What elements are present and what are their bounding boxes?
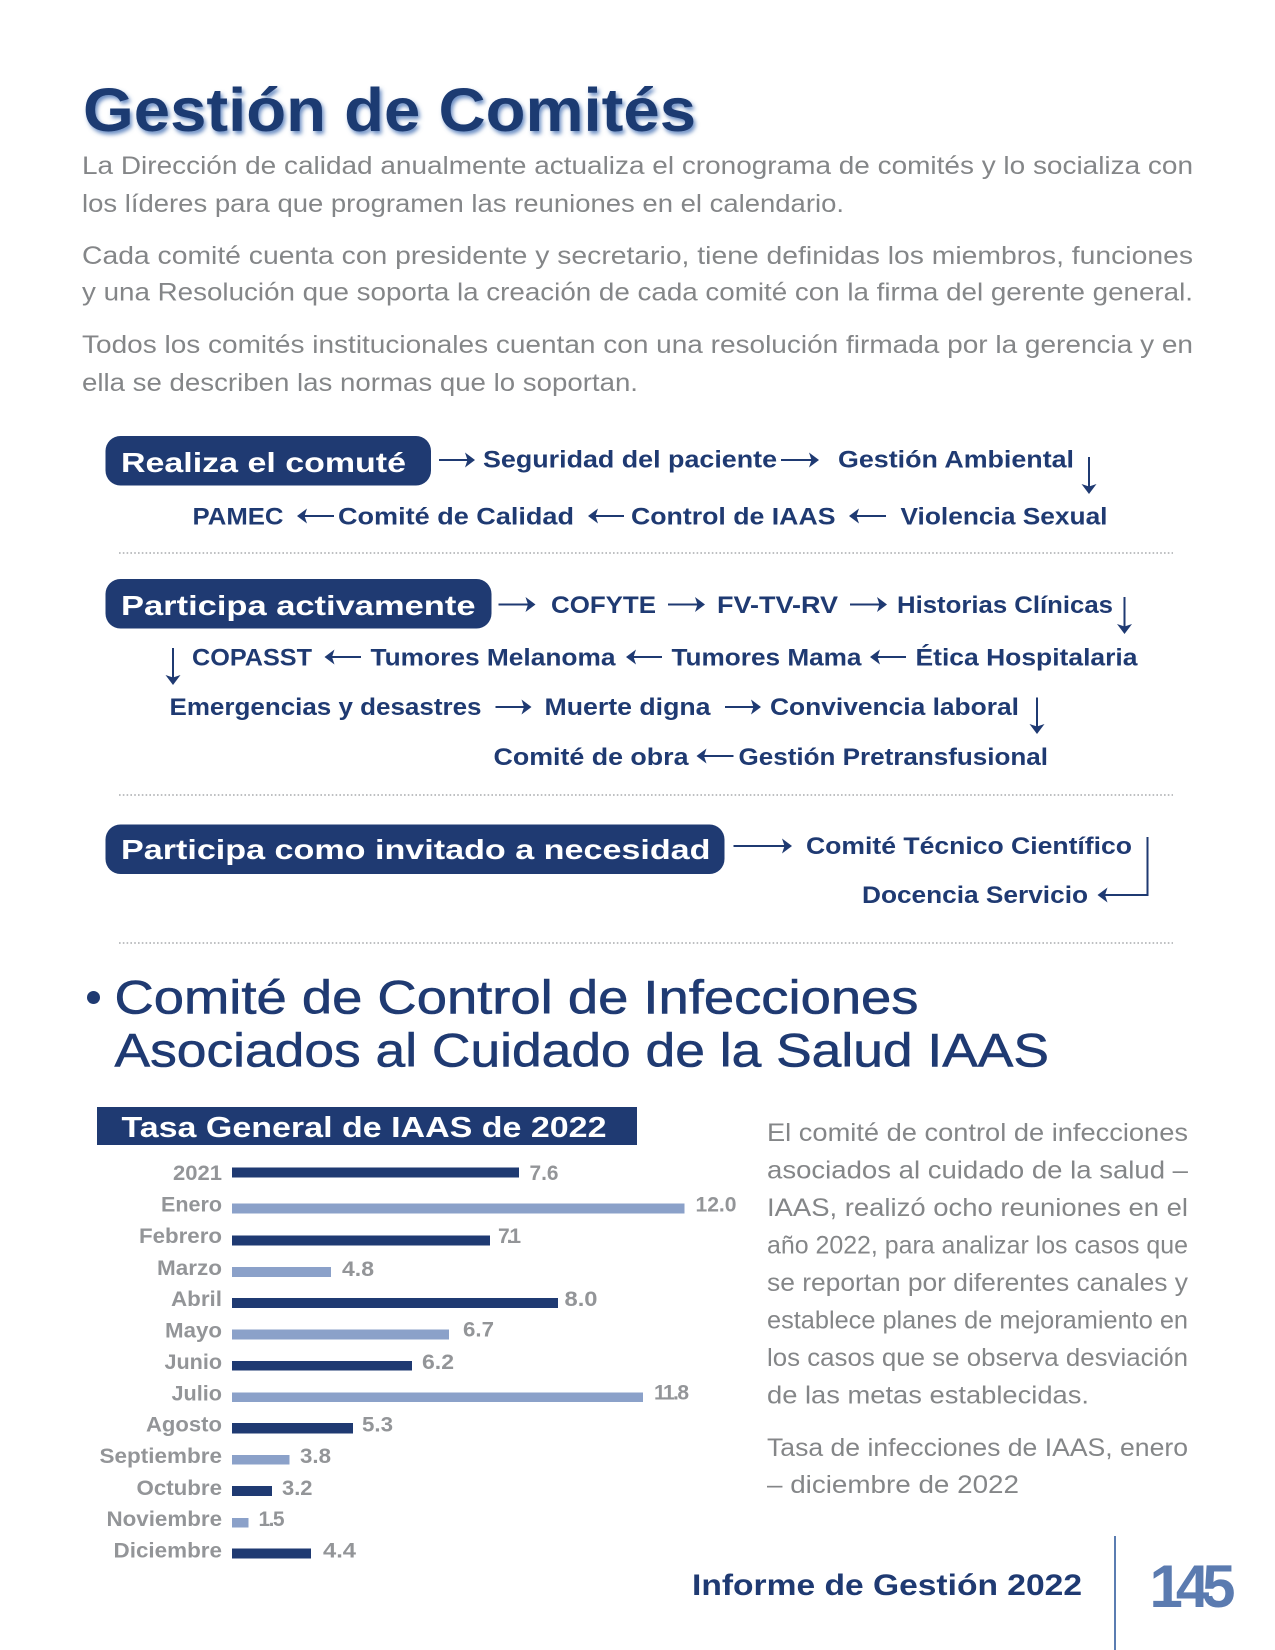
row: Enero [161, 1194, 736, 1216]
flow item: COFYTE [551, 592, 656, 619]
arrow [696, 748, 734, 764]
pill: Realiza el comuté: Realiza el comuté [121, 447, 406, 478]
flow item: Tumores Mama [672, 644, 862, 672]
text block: committee description: establece planes de mejoramiento en [767, 1306, 1188, 1334]
arrow [849, 508, 886, 524]
text block: intro paragraphs: ella se describen las normas que lo soportan. [82, 369, 638, 397]
arrow [734, 838, 792, 854]
row: Mayo: Mayo [165, 1320, 222, 1342]
text block: intro paragraphs [82, 152, 1193, 397]
title: Gestión de Comités [83, 76, 696, 144]
arrow [626, 650, 662, 664]
row: Junio [164, 1351, 454, 1374]
row: Septiembre: 3.8 [300, 1445, 331, 1468]
row: Enero: Enero [161, 1194, 222, 1216]
flow item: Muerte digna [544, 694, 711, 721]
chart banner [97, 1107, 637, 1145]
arrow [496, 700, 532, 714]
row: Febrero [139, 1225, 521, 1248]
arrow down [166, 648, 180, 685]
footer [692, 1536, 1236, 1650]
row: 2021 [173, 1162, 558, 1185]
arrow [870, 650, 906, 664]
row: Marzo: Marzo [157, 1257, 222, 1280]
page number: 145 [1150, 1553, 1236, 1620]
arrow down [1117, 597, 1132, 634]
text block: committee description: – diciembre de 2022 [767, 1471, 1019, 1499]
row: Agosto: 5.3 [362, 1414, 393, 1436]
row: Septiembre: Septiembre [100, 1445, 222, 1468]
text block: intro paragraphs: Cada comité cuenta con presidente y secretario, tiene definidas los miembros, funciones [82, 242, 1193, 270]
arrow [439, 452, 475, 468]
text block: intro paragraphs: Todos los comités institucionales cuentan con una resolución firmada por la gerencia y en [82, 331, 1193, 359]
text block: committee description: los casos que se observa desviación [767, 1344, 1188, 1372]
flow item: Violencia Sexual [900, 504, 1108, 530]
row: Julio: 11.8 [654, 1382, 689, 1404]
section heading [87, 970, 1049, 1076]
arrow down [1082, 457, 1096, 494]
arrow [588, 508, 624, 524]
text block: intro paragraphs: La Dirección de calidad anualmente actualiza el cronograma de comités y lo socializa con [82, 152, 1193, 180]
text block: committee description: de las metas establecidas. [767, 1382, 1089, 1410]
text block: committee description: asociados al cuidado de la salud – [767, 1156, 1188, 1184]
panel: realiza el comité [106, 436, 1108, 530]
row: Febrero: Febrero [139, 1225, 222, 1248]
row: Junio: 6.2 [422, 1351, 454, 1374]
flow item: Comité Técnico Científico [806, 833, 1132, 860]
text block: committee description: El comité de control de infecciones [767, 1119, 1188, 1147]
row: Julio: Julio [172, 1382, 222, 1406]
pill: Realiza el comuté [106, 436, 431, 486]
row: Abril: Abril [171, 1288, 222, 1311]
row: Septiembre [100, 1445, 331, 1468]
arrow [668, 597, 705, 612]
row: Julio [172, 1382, 689, 1406]
row: Abril [171, 1288, 598, 1311]
text block: intro paragraphs: y una Resolución que soporta la creación de cada comité con la firma del gerente general. [82, 278, 1193, 306]
row: Octubre [136, 1477, 312, 1500]
pill: Participa como invitado a necesidad: Participa como invitado a necesidad [121, 834, 710, 865]
arrow [725, 700, 761, 714]
bar chart [97, 1107, 736, 1562]
text block: committee description [767, 1119, 1189, 1499]
heading line 2: Asociados al Cuidado de la Salud IAAS [114, 1024, 1049, 1076]
flow item: Docencia Servicio [862, 882, 1088, 909]
arrow [324, 650, 361, 664]
row: Noviembre: Noviembre [106, 1508, 222, 1531]
text block: committee description: Tasa de infecciones de IAAS, enero [767, 1434, 1188, 1462]
text block: committee description: se reportan por diferentes canales y [767, 1269, 1189, 1297]
chart banner: Tasa General de IAAS de 2022 [122, 1112, 606, 1144]
flow item: Emergencias y desastres [170, 694, 482, 721]
flow item: Historias Clínicas [897, 592, 1113, 619]
flow item: Convivencia laboral [770, 694, 1019, 721]
row: Octubre: Octubre [136, 1477, 222, 1500]
row: 2021: 7.6 [530, 1162, 558, 1185]
arrow [850, 597, 887, 612]
row: Octubre: 3.2 [282, 1477, 312, 1500]
flow item: Gestión Ambiental [838, 446, 1074, 474]
panel: participa activamente [106, 579, 1138, 771]
arrow [781, 452, 819, 468]
pill: Participa activamente: Participa activamente [121, 590, 476, 621]
text block: committee description: IAAS, realizó ocho reuniones en el [767, 1194, 1188, 1222]
row: 2021: 2021 [173, 1162, 222, 1185]
row: Mayo: 6.7 [463, 1318, 494, 1342]
flow item: Comité de Calidad [338, 504, 574, 530]
flow item: PAMEC [192, 504, 284, 530]
footer title: Informe de Gestión 2022 [692, 1569, 1082, 1602]
pill: Participa activamente [106, 579, 492, 628]
flow item: Gestión Pretransfusional [738, 744, 1048, 771]
row: Diciembre [114, 1540, 356, 1562]
row: Junio: Junio [164, 1351, 222, 1374]
bullet [87, 991, 100, 1004]
row: Febrero: 7.1 [498, 1225, 521, 1248]
footer divider [1114, 1536, 1116, 1650]
row: Abril: 8.0 [564, 1288, 598, 1311]
row: Enero: 12.0 [696, 1194, 736, 1216]
flow item: FV-TV-RV [717, 592, 838, 619]
text block: intro paragraphs: los líderes para que programen las reuniones en el calendario. [82, 190, 844, 218]
row: Noviembre [106, 1508, 285, 1531]
elbow arrow [1098, 837, 1148, 902]
flow item: Comité de obra [494, 744, 689, 771]
row: Diciembre: Diciembre [114, 1540, 222, 1562]
row: Marzo [157, 1257, 374, 1281]
row: Agosto [146, 1414, 393, 1436]
row: Diciembre: 4.4 [323, 1540, 356, 1562]
row: Agosto: Agosto [146, 1414, 222, 1436]
arrow [297, 508, 334, 524]
flow item: Seguridad del paciente [483, 446, 777, 474]
arrow [498, 597, 536, 612]
flow item: Ética Hospitalaria [916, 644, 1138, 672]
arrow down [1030, 698, 1044, 734]
row: Noviembre: 1.5 [258, 1508, 285, 1531]
row: Mayo [165, 1318, 494, 1342]
pill: Participa como invitado a necesidad [106, 824, 724, 874]
row: Marzo: 4.8 [342, 1258, 374, 1281]
flow item: Control de IAAS [631, 504, 836, 530]
flow item: Tumores Melanoma [370, 644, 616, 672]
heading line 1: Comité de Control de Infecciones [114, 970, 918, 1024]
flow item: COPASST [192, 644, 312, 672]
panel: participa como invitado [106, 824, 1148, 909]
text block: committee description: año 2022, para analizar los casos que [767, 1232, 1188, 1260]
